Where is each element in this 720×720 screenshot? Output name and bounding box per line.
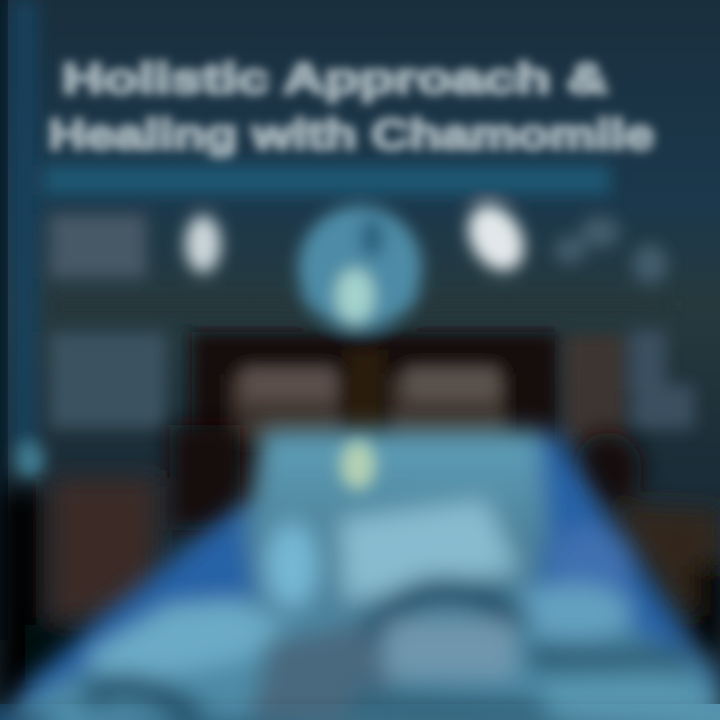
title text: [48, 55, 654, 159]
title text: Holistic Approach &: [62, 55, 608, 103]
icon: left white drop: [185, 215, 221, 273]
fold: dark crease centre: [250, 620, 400, 720]
fold: lower centre grey: [385, 620, 515, 678]
panel: upper left text block: [50, 214, 146, 278]
left wall stripe: [12, 0, 38, 450]
pale centre highlight: [340, 440, 376, 490]
accent dot on left stripe: [15, 442, 45, 480]
pillow area: [245, 430, 548, 620]
headboard left panel highlight: [243, 368, 335, 400]
icon: central moon circle: [298, 206, 422, 330]
panel: right side text block: [565, 330, 694, 445]
title text: Healing with Chamomile: [48, 111, 654, 159]
title: [48, 55, 654, 159]
headboard right panel: [392, 374, 504, 440]
right dresser: [574, 432, 720, 650]
icon: right white moon: [457, 195, 535, 281]
upper scene: [12, 0, 694, 512]
headboard left panel: [232, 374, 340, 440]
bed foot base: [0, 704, 720, 720]
icon: right stars and sparkline: [554, 216, 668, 284]
blanket base: [0, 430, 720, 720]
fold: dark lower right crease: [525, 640, 695, 675]
headboard centre post: [347, 350, 383, 435]
fold: left bright: [266, 523, 318, 607]
furniture: [0, 425, 720, 715]
mid teal bed: [0, 590, 720, 720]
fold: bottom right light: [530, 675, 720, 720]
left dresser: [0, 425, 240, 715]
fold: dark left crease: [85, 686, 200, 720]
panel: lower left text block: [50, 332, 166, 428]
fold: left long light: [85, 600, 285, 685]
bed blanket: [0, 430, 720, 720]
left edge shadow: [0, 0, 8, 640]
headboard: [192, 332, 558, 512]
subtitle band: [44, 165, 610, 195]
dark shelf line: [50, 298, 670, 312]
fold: right periwinkle: [550, 526, 634, 598]
fold: centre bottom dark: [340, 685, 550, 720]
headboard right panel highlight: [406, 368, 498, 400]
fold: centre light: [340, 500, 518, 600]
fold: right light: [512, 584, 632, 640]
fold: dark arch: [370, 590, 525, 635]
